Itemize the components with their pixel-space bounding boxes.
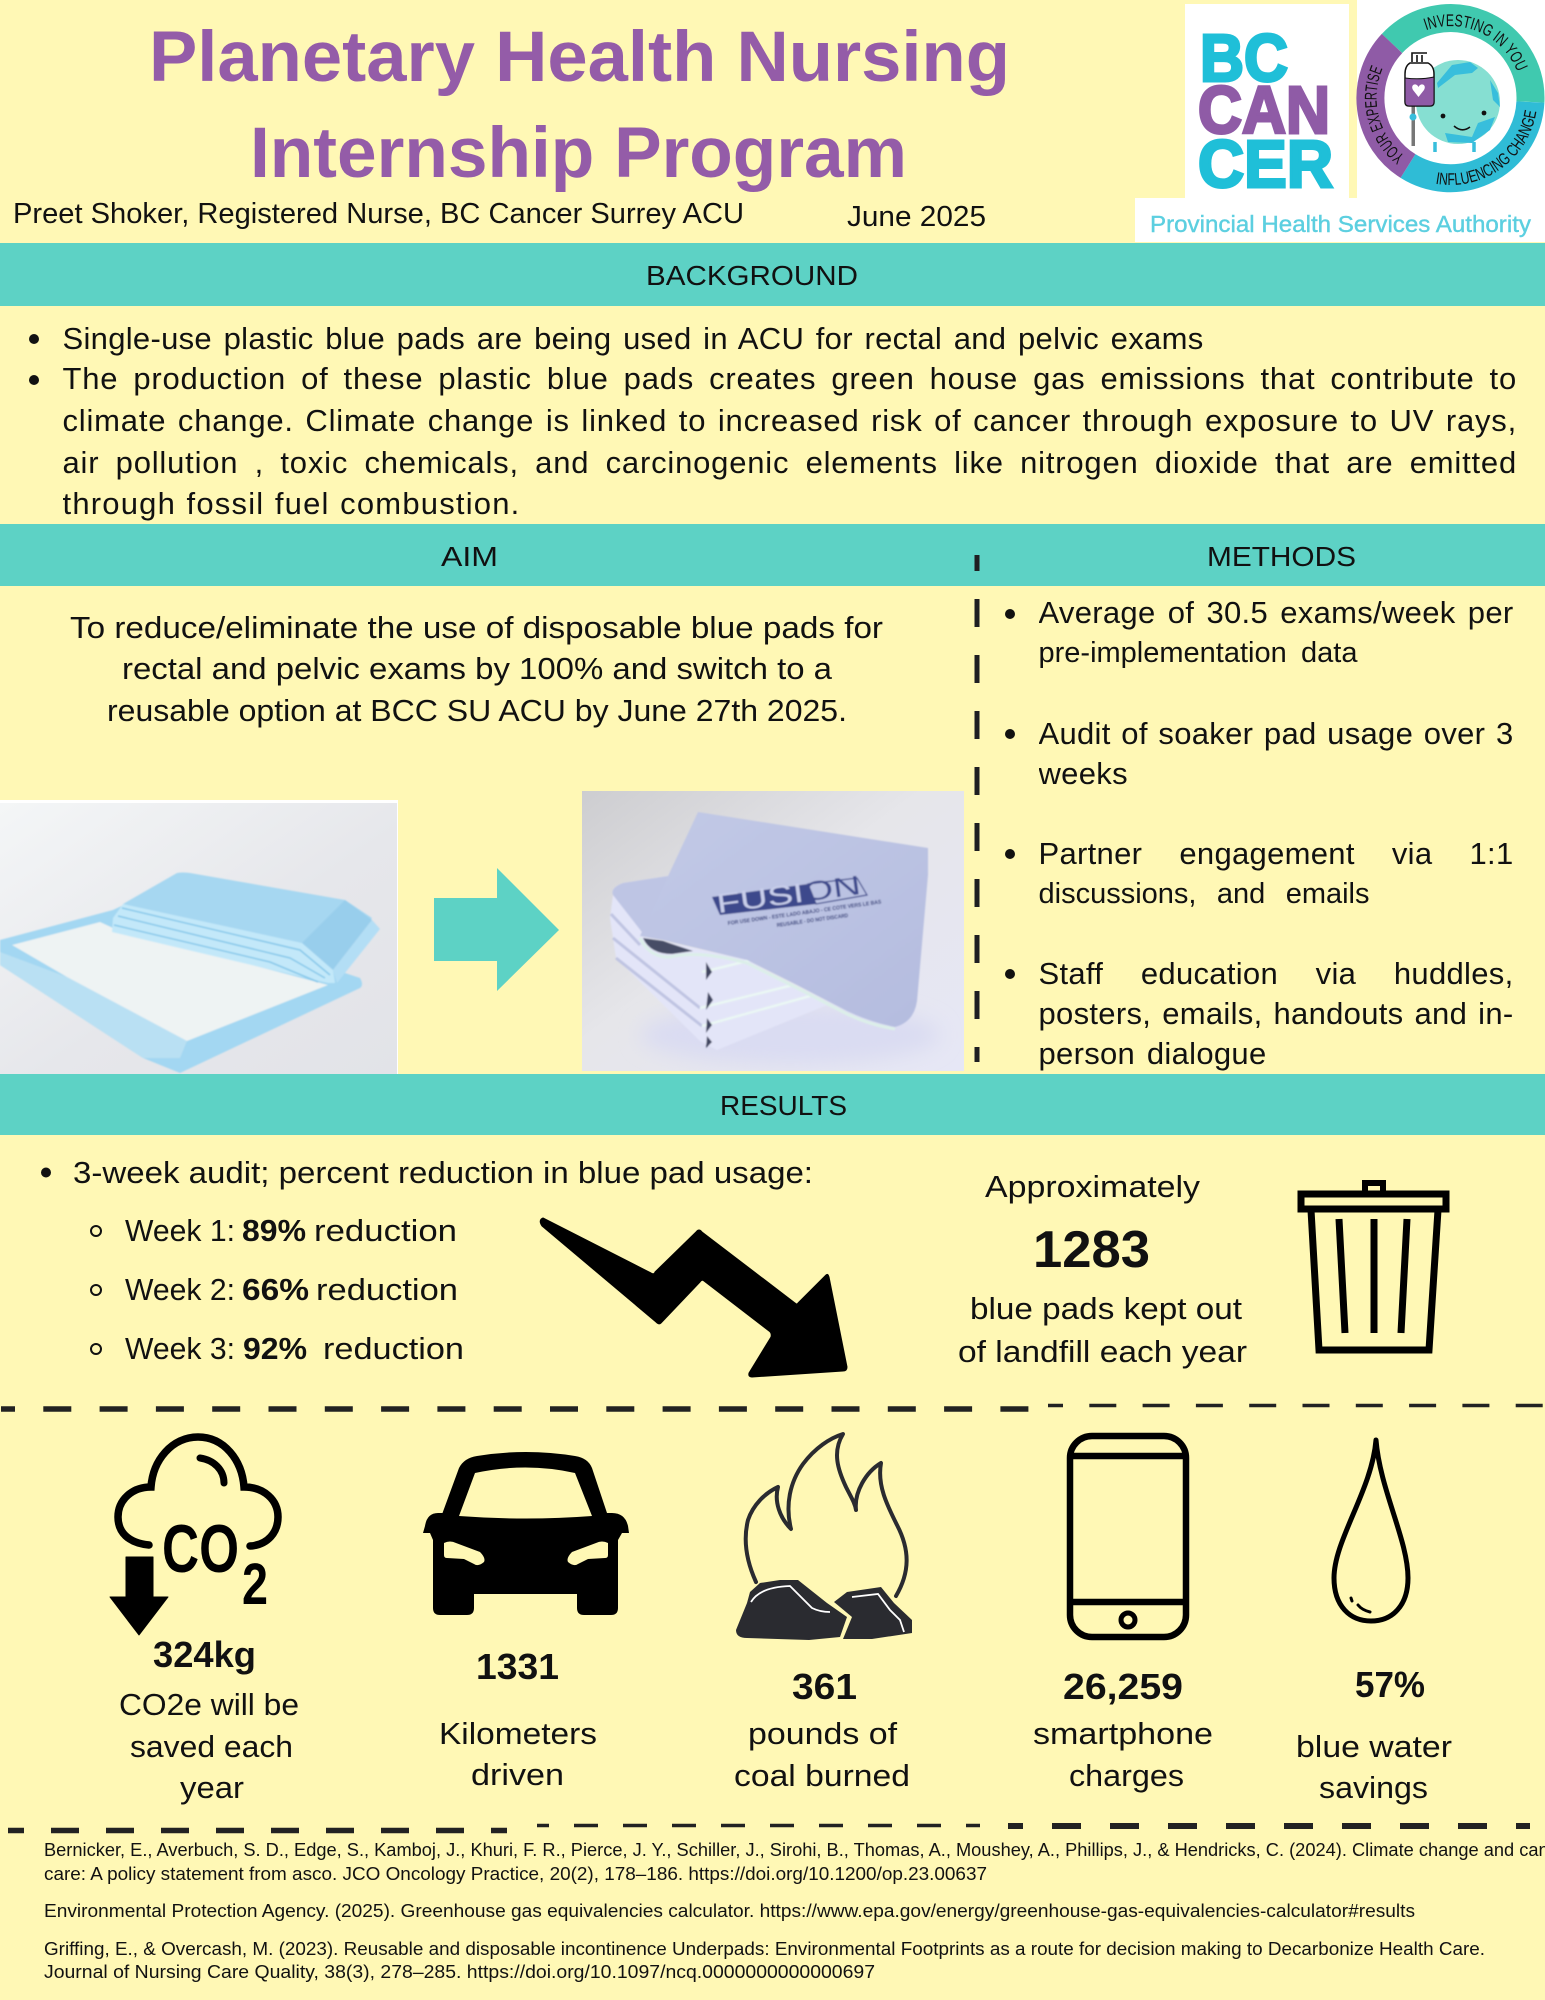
- title: Planetary Health Nursing: [149, 18, 1010, 97]
- icon: CO2 cloud with down arrow: CO: [162, 1511, 239, 1587]
- stat: CO2e saved: 324kg: [153, 1634, 256, 1675]
- heading band: aim and methods: [0, 524, 1545, 586]
- photo: disposable blue pads: [0, 800, 398, 1074]
- methods bullet text: posters, emails, handouts and in-: [1038, 996, 1514, 1030]
- icon: CO2 cloud with down arrow: 2: [242, 1552, 268, 1617]
- logo: Provincial Health Services Authority: [1135, 198, 1545, 242]
- logo: BC Cancer: [1185, 4, 1349, 202]
- logo: Provincial Health Services Authority: Provincial Health Services Authority: [1150, 211, 1532, 237]
- results list: weekly percent reductions: Week 3:: [125, 1332, 235, 1366]
- background bullet text: Single-use plastic blue pads are being used in ACU for rectal and pelvic exams: [62, 321, 1204, 356]
- heading band: results: [0, 1074, 1545, 1135]
- photo: reusable FUSION pads: FUSI ON: [715, 870, 863, 919]
- stat: blue pads kept out of landfill: 1283: [1033, 1221, 1150, 1279]
- logo: BC Cancer: CAN: [1198, 73, 1330, 148]
- stat: blue pads kept out of landfill: Approximately: [985, 1170, 1201, 1204]
- stat: pounds of coal burned: pounds of: [748, 1717, 898, 1751]
- background bullet text: The production of these plastic blue pads creates green house gas emissions that contribute to: [62, 361, 1517, 396]
- stat: blue pads kept out of landfill: [958, 1170, 1247, 1369]
- stat: blue water savings: blue water: [1296, 1730, 1452, 1764]
- stat: blue pads kept out of landfill: of landfill each year: [958, 1335, 1247, 1369]
- logo: BC Cancer: BC: [1200, 21, 1288, 96]
- background bullet text: climate change. Climate change is linked to increased risk of cancer through exposure to UV rays,: [62, 403, 1517, 438]
- stat: smartphone charges: charges: [1069, 1759, 1184, 1793]
- results list: weekly percent reductions: Week 2:: [125, 1273, 235, 1307]
- divider: results and equivalencies: [1, 1406, 1545, 1409]
- references: Bernicker, E., Averbuch, S. D., Edge, S., Kamboj, J., Khuri, F. R., Pierce, J. Y., Schiller, J., Sirohi, B., Thomas, A., Moushey, A., Phillips, J., & Hendricks, C. (2024). Climate change and cancer: [44, 1840, 1545, 1860]
- title: [149, 18, 1010, 193]
- references: [44, 1840, 1545, 1982]
- references: Environmental Protection Agency. (2025). Greenhouse gas equivalencies calculator. https://www.epa.gov/energy/greenhouse-gas-equivalencies-calculator#results: [44, 1901, 1415, 1921]
- stat: CO2e saved: year: [180, 1771, 244, 1805]
- logo: planetary health ring with earth and IV bag: [1356, 0, 1545, 198]
- results list: weekly percent reductions: 92%: [243, 1332, 307, 1366]
- results list: weekly percent reductions: reduction: [316, 1273, 458, 1307]
- photo: reusable FUSION pads: [582, 791, 964, 1071]
- results list: weekly percent reductions: 66%: [242, 1273, 309, 1307]
- background bullet text: [29, 321, 1517, 521]
- icon: trash can: [1301, 1183, 1446, 1350]
- stat: pounds of coal burned: [734, 1666, 910, 1793]
- methods bullet text: discussions, and emails: [1038, 878, 1370, 910]
- results list: weekly percent reductions: 3-week audit; percent reduction in blue pad usage:: [73, 1156, 813, 1190]
- date: June 2025: [847, 201, 986, 233]
- icon: car: [423, 1452, 629, 1615]
- heading band: background: [0, 243, 1545, 306]
- stat: kilometers driven: 1331: [476, 1646, 559, 1687]
- aim statement: To reduce/eliminate the use of disposable blue pads for: [70, 611, 883, 645]
- stat: blue water savings: 57%: [1355, 1664, 1425, 1705]
- results list: weekly percent reductions: reduction: [323, 1332, 464, 1366]
- references: Griffing, E., & Overcash, M. (2023). Reusable and disposable incontinence Underpads: Environmental Footprints as a route for decision making to Decarbonize Health Care.: [44, 1939, 1485, 1959]
- background bullet text: air pollution , toxic chemicals, and carcinogenic elements like nitrogen dioxide that are emitted: [62, 445, 1517, 480]
- results list: weekly percent reductions: Week 1:: [125, 1214, 235, 1248]
- aim statement: reusable option at BCC SU ACU by June 27th 2025.: [107, 694, 847, 728]
- icon: downward zigzag arrow: [540, 1218, 847, 1377]
- background bullet text: through fossil fuel combustion.: [62, 486, 520, 521]
- stat: pounds of coal burned: coal burned: [734, 1759, 910, 1793]
- references: care: A policy statement from asco. JCO Oncology Practice, 20(2), 178–186. https://doi.org/10.1200/op.23.00637: [44, 1864, 987, 1884]
- divider: references: [8, 1826, 1530, 1830]
- methods bullet text: pre-implementation data: [1038, 636, 1358, 668]
- stat: kilometers driven: Kilometers: [439, 1717, 597, 1751]
- icon: CO2 cloud with down arrow: [110, 1437, 278, 1635]
- author byline: Preet Shoker, Registered Nurse, BC Cancer Surrey ACU: [13, 198, 744, 230]
- stat: pounds of coal burned: 361: [792, 1666, 857, 1707]
- methods bullet text: person dialogue: [1038, 1036, 1266, 1071]
- methods bullet text: Average of 30.5 exams/week per: [1038, 595, 1514, 630]
- photo: reusable FUSION pads: REUSABLE - DO NOT DISCARD: [776, 913, 849, 929]
- stat: smartphone charges: 26,259: [1063, 1666, 1183, 1707]
- aim statement: rectal and pelvic exams by 100% and switch to a: [122, 652, 832, 686]
- logo: planetary health ring with earth and IV bag: INVESTING IN YOU: [1423, 14, 1528, 70]
- methods bullet text: [1005, 595, 1514, 1071]
- logo: BC Cancer: CER: [1198, 127, 1333, 202]
- methods bullet text: Staff education via huddles,: [1038, 956, 1514, 991]
- icon: water drop: [1334, 1440, 1408, 1621]
- arrow: disposable to reusable: [434, 868, 559, 991]
- stat: kilometers driven: [439, 1646, 597, 1792]
- references: Journal of Nursing Care Quality, 38(3), 278–285. https://doi.org/10.1097/ncq.0000000000000697: [44, 1962, 875, 1982]
- methods bullet text: weeks: [1038, 756, 1128, 791]
- title: Internship Program: [250, 114, 907, 193]
- aim statement: [70, 611, 883, 728]
- methods bullet text: Audit of soaker pad usage over 3: [1038, 716, 1514, 751]
- stat: blue water savings: [1296, 1664, 1452, 1805]
- stat: blue pads kept out of landfill: blue pads kept out: [970, 1292, 1243, 1326]
- divider: aim and methods: [974, 555, 980, 1062]
- heading band: aim and methods: METHODS: [1207, 541, 1356, 572]
- stat: CO2e saved: saved each: [130, 1730, 293, 1764]
- stat: blue water savings: savings: [1319, 1771, 1428, 1805]
- heading band: background: BACKGROUND: [646, 260, 858, 291]
- stat: smartphone charges: [1033, 1666, 1213, 1793]
- methods bullet text: Partner engagement via 1:1: [1038, 836, 1514, 871]
- stat: CO2e saved: [119, 1634, 299, 1805]
- results list: weekly percent reductions: 89%: [242, 1214, 306, 1248]
- stat: CO2e saved: CO2e will be: [119, 1688, 299, 1722]
- heading band: results: RESULTS: [720, 1090, 847, 1121]
- logo: planetary health ring with earth and IV bag: YOUR EXPERTISE: [1364, 65, 1402, 165]
- icon: burning coal: [736, 1434, 912, 1640]
- icon: smartphone: [1070, 1436, 1186, 1637]
- heading band: aim and methods: AIM: [441, 541, 498, 572]
- photo: reusable FUSION pads: FOR USE DOWN - ESTE LADO ABAJO - CE COTE VERS LE BAS: [727, 899, 882, 927]
- results list: weekly percent reductions: [41, 1156, 813, 1366]
- stat: smartphone charges: smartphone: [1033, 1717, 1213, 1751]
- logo: planetary health ring with earth and IV bag: INFLUENCING CHANGE: [1436, 110, 1536, 185]
- results list: weekly percent reductions: reduction: [314, 1214, 457, 1248]
- stat: kilometers driven: driven: [471, 1758, 564, 1792]
